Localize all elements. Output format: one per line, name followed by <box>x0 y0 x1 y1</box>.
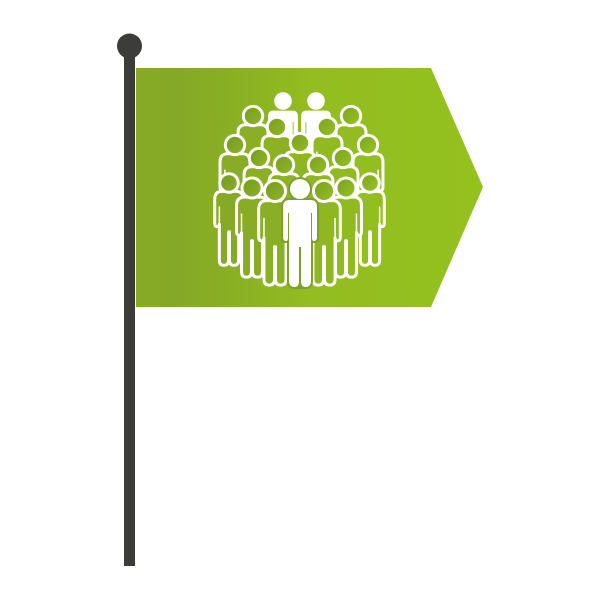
person outline <box>259 180 291 285</box>
person outline <box>244 148 274 244</box>
person outline <box>215 174 243 265</box>
person outline <box>336 106 366 202</box>
icon: crowd of people <box>215 92 384 287</box>
person outline <box>312 117 342 213</box>
front white person <box>283 179 317 287</box>
flag banner <box>136 68 483 307</box>
person outline <box>353 135 383 231</box>
person outline <box>269 155 299 251</box>
front person shadow <box>283 179 317 287</box>
person outline <box>262 117 292 213</box>
person outline <box>303 155 333 251</box>
flag pole <box>117 34 142 566</box>
person outline <box>237 178 267 277</box>
person outline <box>328 148 358 244</box>
person outline <box>308 180 340 285</box>
person outline <box>220 135 250 231</box>
back row white person right <box>301 92 331 187</box>
back row white person left <box>268 92 298 187</box>
person outline <box>331 178 361 277</box>
person outline <box>356 174 384 265</box>
person outline <box>285 133 315 229</box>
person outline <box>238 106 268 202</box>
